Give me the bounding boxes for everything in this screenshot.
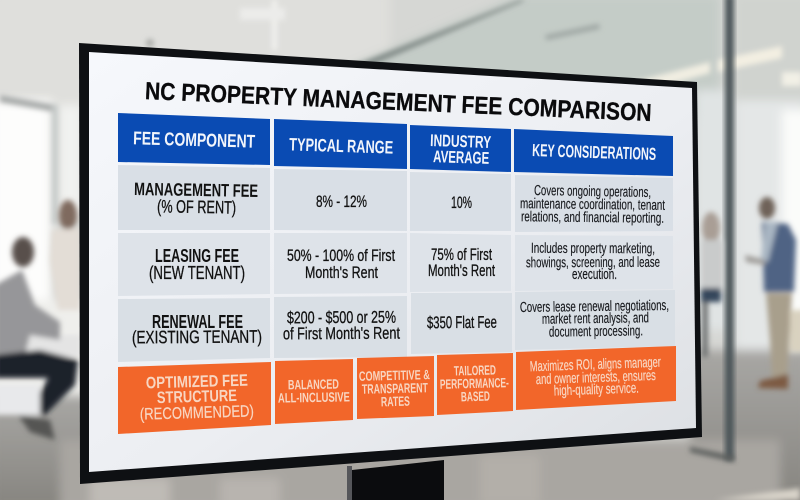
row: renewal fee: $350 Flat Fee	[427, 313, 497, 332]
header row: FEE COMPONENT	[133, 127, 256, 152]
row: management fee: 10%	[451, 193, 472, 212]
row: optimized fee structure (recommended): COMPETITIVE &	[359, 367, 430, 384]
row: optimized fee structure (recommended): ALL-INCLUSIVE	[278, 389, 350, 406]
row: optimized fee structure (recommended): PERFORMANCE-	[440, 375, 509, 392]
row: management fee: 8% - 12%	[316, 192, 367, 211]
row: management fee	[118, 165, 673, 232]
row: leasing fee: 50% - 100% of First	[287, 246, 395, 265]
row: leasing fee: showings, screening, and lease	[526, 255, 660, 271]
row: leasing fee: LEASING FEE	[155, 246, 239, 266]
row: renewal fee: (EXISTING TENANT)	[132, 327, 262, 347]
header row: KEY CONSIDERATIONS	[532, 140, 656, 164]
monitor stand	[347, 460, 444, 500]
row: leasing fee	[118, 233, 673, 296]
header row	[118, 113, 673, 176]
row: renewal fee	[118, 290, 675, 362]
row: renewal fee: document processing.	[549, 323, 643, 341]
monitor screen	[89, 52, 696, 472]
header row: INDUSTRY	[430, 131, 492, 152]
row: optimized fee structure (recommended): BASED	[461, 389, 490, 404]
row: optimized fee structure (recommended): STRUCTURE	[157, 387, 237, 407]
row: renewal fee: of First Month's Rent	[283, 324, 400, 343]
row: optimized fee structure (recommended): high-quality service.	[554, 381, 639, 399]
row: leasing fee: Includes property marketing,	[531, 241, 655, 257]
row: optimized fee structure (recommended): (RECOMMENDED)	[140, 402, 254, 424]
row: optimized fee structure (recommended): TRANSPARENT	[362, 380, 429, 397]
row: leasing fee: execution.	[572, 267, 617, 283]
header row: TYPICAL RANGE	[289, 134, 393, 158]
blurred standing woman, left	[50, 200, 80, 310]
row: leasing fee: 75% of First	[431, 245, 492, 264]
row: optimized fee structure (recommended): OPTIMIZED FEE	[146, 372, 248, 392]
title: NC PROPERTY MANAGEMENT FEE COMPARISON	[144, 78, 652, 127]
row: management fee: maintenance coordination, tenant	[520, 196, 665, 214]
light floor strip	[715, 488, 800, 500]
row: optimized fee structure (recommended): Maximizes ROI, aligns manager	[530, 355, 661, 375]
row: optimized fee structure (recommended): BALANCED	[288, 377, 339, 392]
row: optimized fee structure (recommended): and owner interests, ensures	[536, 368, 656, 388]
vertical glass frame	[690, 0, 734, 462]
ceiling fixtures	[0, 0, 800, 224]
row: renewal fee: $200 - $500 or 25%	[287, 308, 396, 327]
blurred seated man, left	[0, 237, 81, 440]
row: leasing fee: Month's Rent	[305, 263, 378, 282]
table	[118, 113, 676, 434]
row: renewal fee: Covers lease renewal negotiations,	[520, 298, 669, 316]
header row: AVERAGE	[433, 147, 489, 168]
row: leasing fee: (NEW TENANT)	[149, 263, 245, 283]
row: management fee: Covers ongoing operations,	[534, 183, 651, 201]
row: management fee: relations, and financial reporting.	[521, 209, 664, 227]
row: optimized fee structure (recommended): TAILORED	[454, 362, 496, 379]
blurred woman, right of monitor	[701, 212, 723, 357]
row: management fee: (% OF RENT)	[157, 196, 236, 218]
row: renewal fee: RENEWAL FEE	[152, 312, 243, 332]
row: management fee: MANAGEMENT FEE	[134, 179, 258, 201]
row: optimized fee structure (recommended): RATES	[381, 394, 410, 409]
row: renewal fee: market rent analysis, and	[542, 310, 649, 328]
blurred standing man, right	[745, 197, 800, 389]
monitor bezel	[79, 43, 702, 484]
row: optimized fee structure (recommended)	[118, 346, 676, 434]
row: leasing fee: Month's Rent	[428, 261, 495, 280]
